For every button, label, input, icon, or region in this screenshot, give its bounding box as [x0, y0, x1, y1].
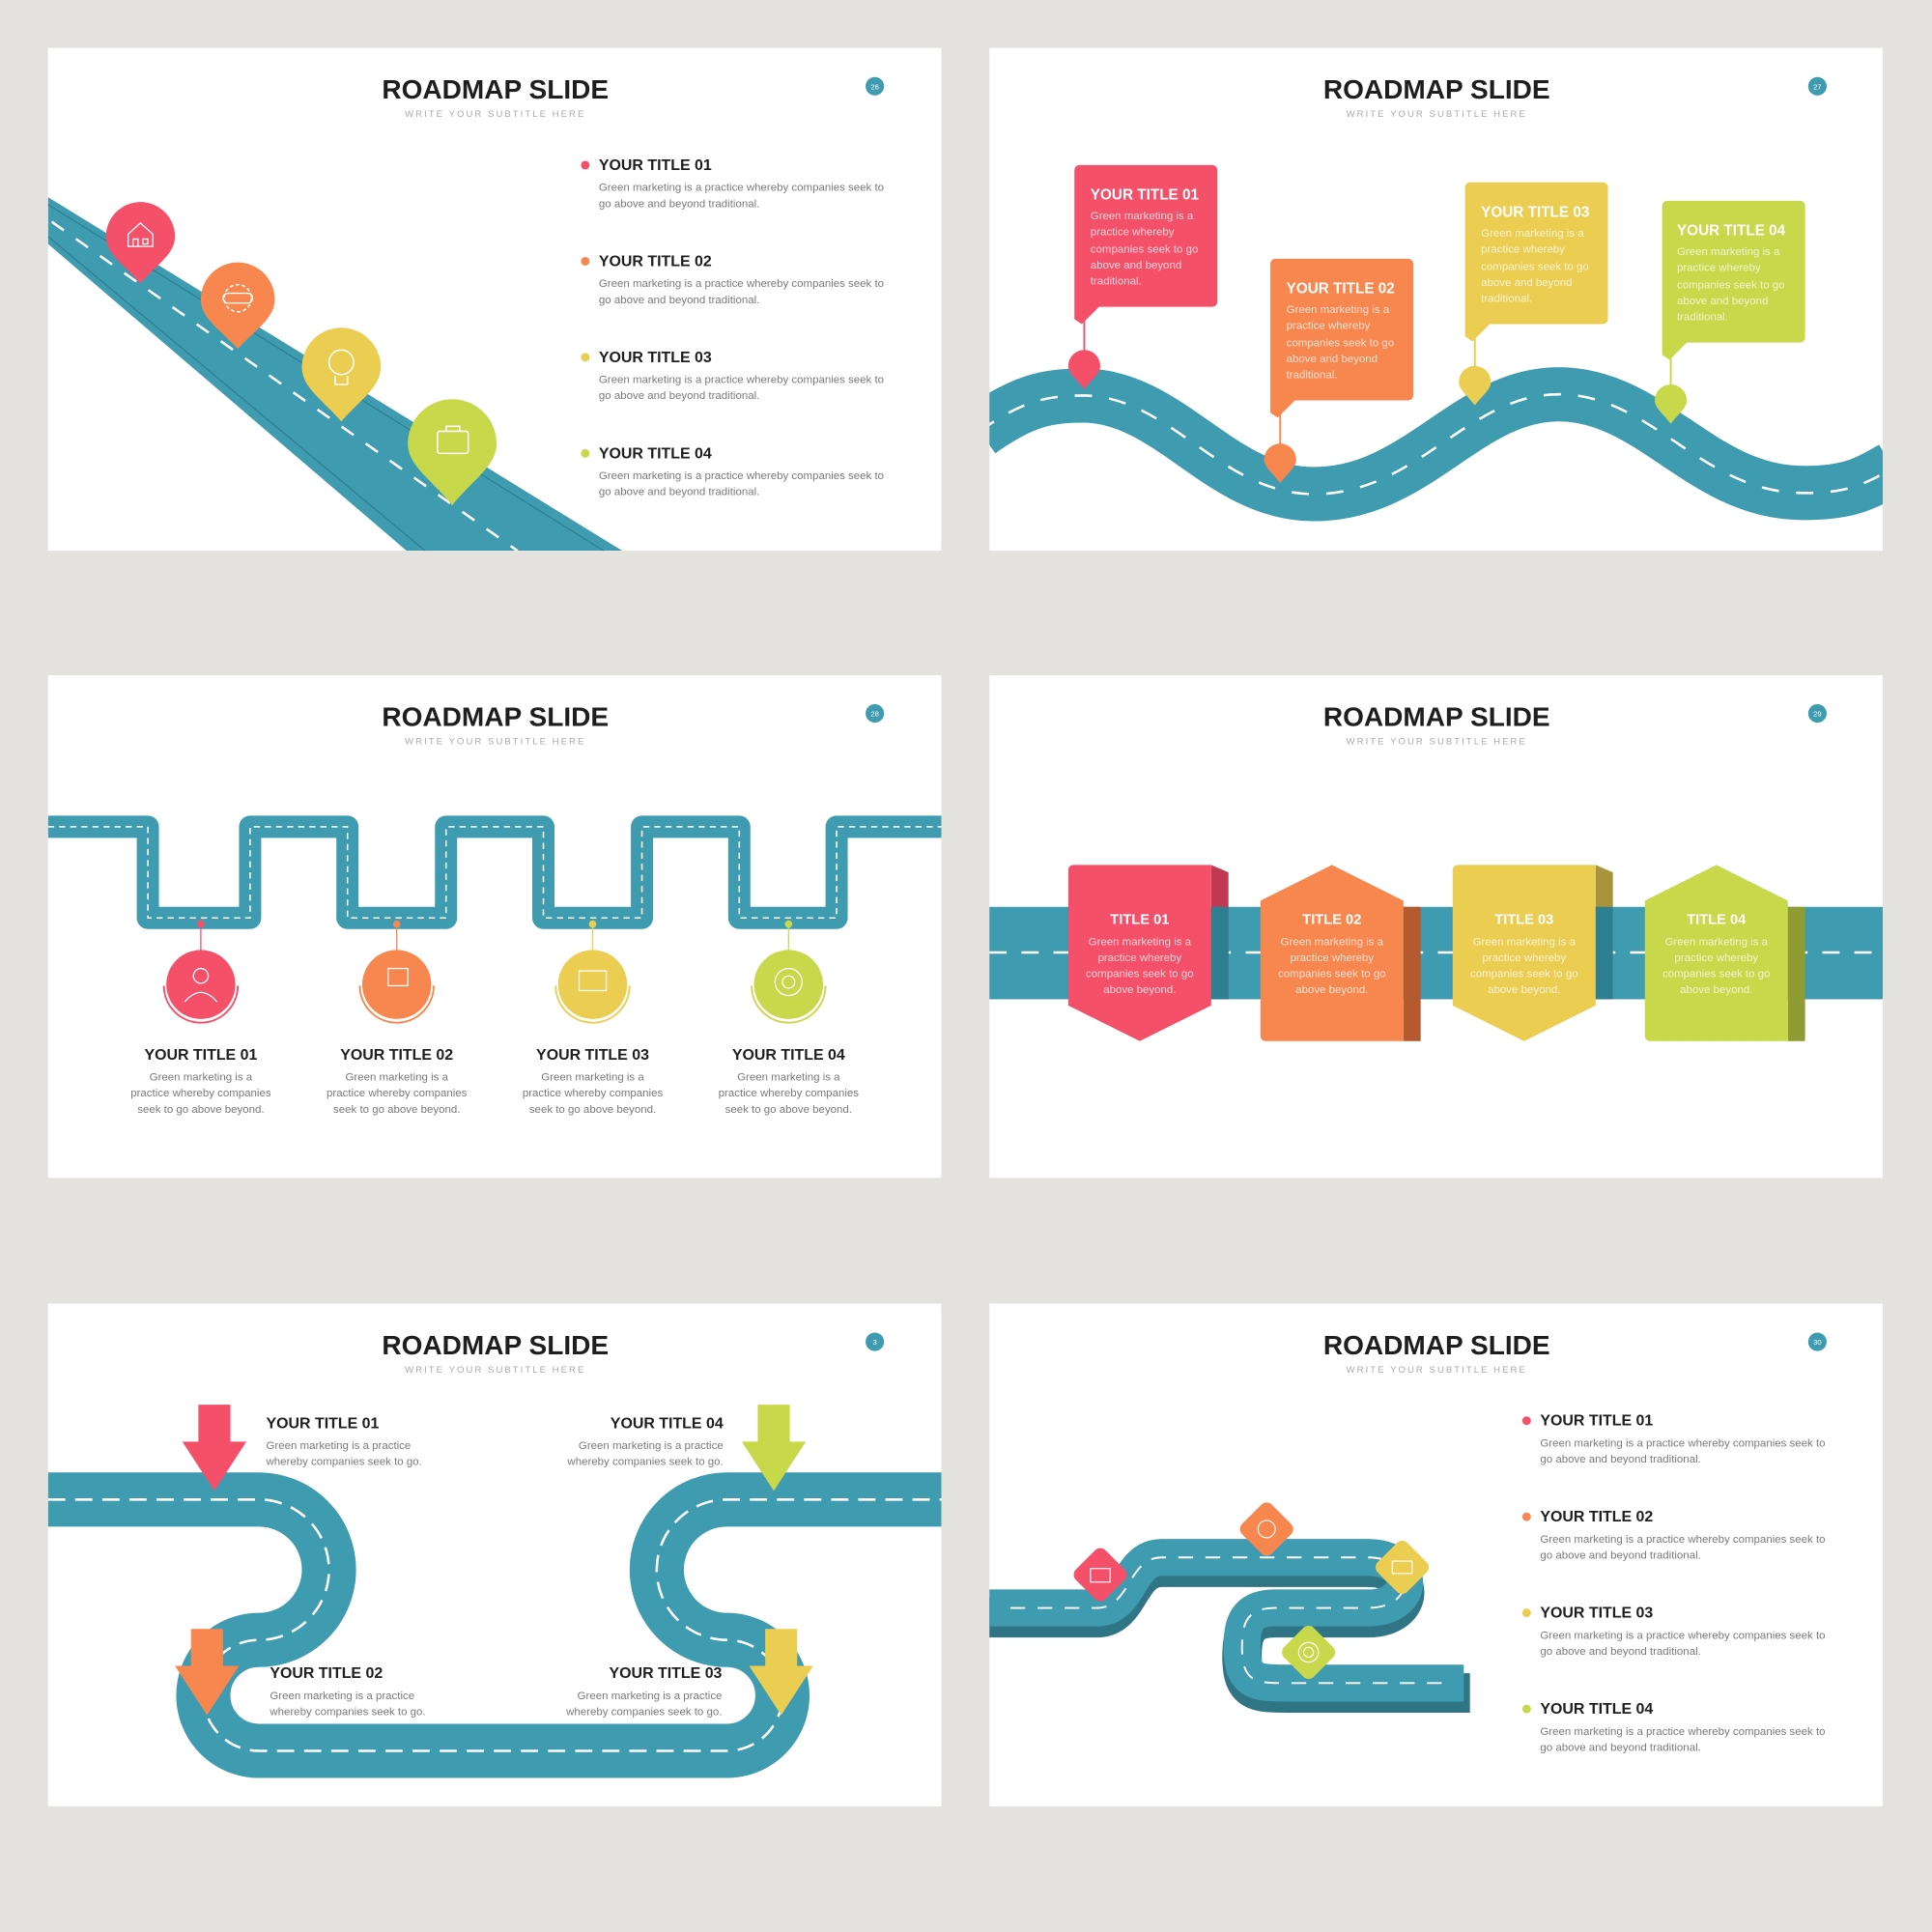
heading: WRITE YOUR SUBTITLE HERE [405, 736, 585, 747]
callout 01: YOUR TITLE 01 [1091, 187, 1200, 204]
list items: YOUR TITLE 04 [599, 445, 712, 462]
callout 01 [1068, 165, 1217, 389]
page number [1808, 704, 1827, 723]
callout 01: practice whereby [1091, 227, 1175, 239]
milestone 01 [130, 921, 271, 1116]
milestone 02: practice whereby companies [327, 1088, 468, 1099]
list items: Green marketing is a practice whereby companies seek to [599, 183, 884, 194]
text 02: Green marketing is a practice [270, 1690, 414, 1702]
callout 03: YOUR TITLE 03 [1481, 204, 1589, 220]
page number: 30 [1813, 1338, 1822, 1347]
heading: WRITE YOUR SUBTITLE HERE [405, 109, 585, 120]
page number: 29 [1813, 710, 1822, 719]
banner 04: practice whereby [1674, 952, 1758, 964]
text 02: YOUR TITLE 02 [270, 1665, 383, 1682]
callout 04: practice whereby [1677, 263, 1761, 274]
panel: slide 27 wavy road [980, 48, 1892, 551]
diamond 04 [1279, 1623, 1338, 1682]
banner 01: companies seek to go [1086, 968, 1194, 980]
milestone 02 [327, 921, 468, 1116]
arrow 01 [183, 1405, 246, 1491]
arrow 04 [742, 1405, 806, 1491]
banner 01: Green marketing is a [1089, 936, 1192, 948]
callout 02: practice whereby [1287, 321, 1371, 332]
milestone 02: seek to go above beyond. [333, 1104, 460, 1116]
list items: Green marketing is a practice whereby companies seek to [599, 375, 884, 386]
page number: 28 [870, 710, 879, 719]
text 02: whereby companies seek to go. [269, 1707, 426, 1719]
banner 04: companies seek to go [1662, 968, 1771, 980]
banner 04: Green marketing is a [1665, 936, 1769, 948]
callout 04: Green marketing is a [1677, 246, 1780, 258]
page number [866, 704, 884, 723]
callout 04: companies seek to go [1677, 279, 1785, 291]
list items: Green marketing is a practice whereby companies seek to [599, 278, 884, 290]
S road [48, 1499, 941, 1750]
callout 01: Green marketing is a [1091, 211, 1194, 222]
callout 04: above and beyond [1677, 296, 1768, 307]
list items: Green marketing is a practice whereby companies seek to [599, 470, 884, 482]
arrow 03 [750, 1629, 813, 1716]
heading: WRITE YOUR SUBTITLE HERE [1347, 736, 1527, 747]
milestone 02: Green marketing is a [345, 1072, 449, 1084]
callout 03 [1459, 183, 1608, 406]
callout 02: YOUR TITLE 02 [1287, 281, 1395, 298]
milestone 01: YOUR TITLE 01 [144, 1047, 257, 1064]
heading: ROADMAP SLIDE [1323, 1330, 1550, 1360]
banner 03: practice whereby [1482, 952, 1566, 964]
heading [1323, 1330, 1550, 1376]
pin 1 house [106, 202, 175, 283]
list items: Green marketing is a practice whereby companies seek to [1540, 1726, 1826, 1738]
banner 03: above beyond. [1488, 984, 1560, 996]
text 04: Green marketing is a practice [579, 1440, 724, 1452]
wavy road [980, 394, 1892, 494]
milestone 02: YOUR TITLE 02 [340, 1047, 453, 1064]
milestone 01: practice whereby companies [130, 1088, 271, 1099]
banner 01 [1068, 865, 1229, 1041]
callout 02: Green marketing is a [1287, 304, 1390, 316]
banner 04: TITLE 04 [1687, 913, 1747, 928]
heading: WRITE YOUR SUBTITLE HERE [1347, 1365, 1527, 1376]
callout 03: Green marketing is a [1481, 228, 1584, 240]
text 03: whereby companies seek to go. [565, 1707, 722, 1719]
milestone 01: seek to go above beyond. [137, 1104, 265, 1116]
page number [866, 1332, 884, 1351]
page number [1808, 1332, 1827, 1351]
panel: slide 3 S-curve road [48, 1303, 941, 1806]
heading [1323, 701, 1550, 747]
list items: Green marketing is a practice whereby companies seek to [1540, 1534, 1826, 1546]
callout 02 [1264, 259, 1413, 483]
straight road [989, 907, 1883, 999]
text 03: YOUR TITLE 03 [610, 1665, 723, 1682]
diamond 01 [1070, 1545, 1130, 1605]
text 02 [269, 1665, 426, 1719]
callout 03: practice whereby [1481, 243, 1565, 255]
banner 03: Green marketing is a [1473, 936, 1577, 948]
text 01: Green marketing is a practice [267, 1440, 411, 1452]
list items: YOUR TITLE 01 [599, 157, 712, 174]
list items: go above and beyond traditional. [1540, 1742, 1701, 1753]
banner 01: TITLE 01 [1110, 913, 1169, 928]
banner 02: TITLE 02 [1302, 913, 1361, 928]
heading: WRITE YOUR SUBTITLE HERE [1347, 109, 1527, 120]
text 04: whereby companies seek to go. [566, 1457, 724, 1468]
diamond 03 [1373, 1538, 1432, 1597]
callout 04 [1655, 201, 1805, 424]
text 01 [266, 1415, 422, 1468]
callout 02: traditional. [1287, 370, 1338, 382]
heading: ROADMAP SLIDE [382, 74, 609, 104]
heading [382, 701, 609, 747]
page number [866, 77, 884, 96]
banner 04: above beyond. [1680, 984, 1752, 996]
milestone 01: Green marketing is a [150, 1072, 253, 1084]
callout 03: above and beyond [1481, 277, 1573, 289]
text 01: YOUR TITLE 01 [267, 1415, 380, 1432]
list items: go above and beyond traditional. [599, 295, 759, 306]
heading [1323, 74, 1550, 120]
milestone 03: practice whereby companies [523, 1088, 663, 1099]
list items: YOUR TITLE 01 [1540, 1413, 1653, 1430]
callout 04: YOUR TITLE 04 [1677, 223, 1786, 240]
callout 03: companies seek to go [1481, 261, 1589, 272]
milestone 04: practice whereby companies [719, 1088, 859, 1099]
list items: go above and beyond traditional. [1540, 1454, 1701, 1465]
banner 03 [1453, 865, 1613, 1041]
list items: go above and beyond traditional. [599, 198, 759, 210]
banner 01: above beyond. [1103, 984, 1176, 996]
pin 3 bulb [301, 327, 381, 421]
page number [1808, 77, 1827, 96]
milestone 03: seek to go above beyond. [529, 1104, 656, 1116]
list items: go above and beyond traditional. [599, 487, 759, 498]
3D road [980, 1557, 1470, 1693]
milestone 04: Green marketing is a [737, 1072, 840, 1084]
text 04: YOUR TITLE 04 [611, 1415, 724, 1432]
heading: ROADMAP SLIDE [382, 701, 609, 731]
heading: ROADMAP SLIDE [1323, 74, 1550, 104]
banner 02: practice whereby [1290, 952, 1374, 964]
panel: slide 26 diagonal road [48, 48, 941, 551]
callout 02: companies seek to go [1287, 337, 1394, 349]
milestone 04: YOUR TITLE 04 [732, 1047, 845, 1064]
list items: YOUR TITLE 02 [1540, 1509, 1653, 1525]
text 04 [566, 1415, 724, 1468]
diamond 02 [1237, 1499, 1296, 1559]
page number: 3 [872, 1338, 877, 1347]
milestone 04 [719, 921, 859, 1116]
text 03: Green marketing is a practice [578, 1690, 722, 1702]
list items: YOUR TITLE 04 [1540, 1701, 1653, 1718]
list items: Green marketing is a practice whereby companies seek to [1540, 1437, 1826, 1449]
milestone 03 [523, 921, 663, 1116]
milestone 03: Green marketing is a [541, 1072, 644, 1084]
diagonal road [48, 197, 622, 551]
list items: YOUR TITLE 03 [599, 350, 712, 366]
callout 01: traditional. [1091, 276, 1142, 288]
banner 03: companies seek to go [1470, 968, 1578, 980]
list items [1522, 1413, 1826, 1753]
text 01: whereby companies seek to go. [266, 1457, 422, 1468]
banner 02: above beyond. [1295, 984, 1368, 996]
callout 01: companies seek to go [1091, 243, 1198, 255]
callout 02: above and beyond [1287, 354, 1378, 365]
milestone 03: YOUR TITLE 03 [536, 1047, 649, 1064]
pin 4 briefcase [408, 399, 497, 505]
list items: go above and beyond traditional. [1540, 1550, 1701, 1562]
pin 2 gear [201, 263, 274, 349]
list items: go above and beyond traditional. [599, 390, 759, 402]
callout 03: traditional. [1481, 294, 1532, 305]
list items [581, 157, 884, 498]
heading: WRITE YOUR SUBTITLE HERE [405, 1365, 585, 1376]
callout 04: traditional. [1677, 312, 1728, 324]
page number: 26 [870, 82, 879, 91]
heading [382, 1330, 609, 1376]
heading [382, 74, 609, 120]
milestone 04: seek to go above beyond. [725, 1104, 852, 1116]
list items: YOUR TITLE 03 [1540, 1605, 1653, 1622]
list items: go above and beyond traditional. [1540, 1646, 1701, 1658]
banner 03: TITLE 03 [1494, 913, 1553, 928]
page number: 27 [1813, 82, 1822, 91]
panel: slide 28 square wave road [48, 675, 941, 1178]
banner 02 [1261, 865, 1421, 1041]
square wave road [48, 827, 941, 918]
banner 01: practice whereby [1097, 952, 1181, 964]
heading: ROADMAP SLIDE [1323, 701, 1550, 731]
banner 02: Green marketing is a [1281, 936, 1384, 948]
list items: YOUR TITLE 02 [599, 254, 712, 270]
banner 02: companies seek to go [1278, 968, 1386, 980]
heading: ROADMAP SLIDE [382, 1330, 609, 1360]
text 03 [565, 1665, 723, 1719]
panel: slide 30 3D road [980, 1303, 1883, 1806]
banner 04 [1645, 865, 1805, 1041]
arrow 02 [175, 1629, 239, 1716]
callout 01: above and beyond [1091, 260, 1181, 271]
list items: Green marketing is a practice whereby companies seek to [1540, 1630, 1826, 1641]
panel: slide 29 banner road [989, 675, 1883, 1178]
